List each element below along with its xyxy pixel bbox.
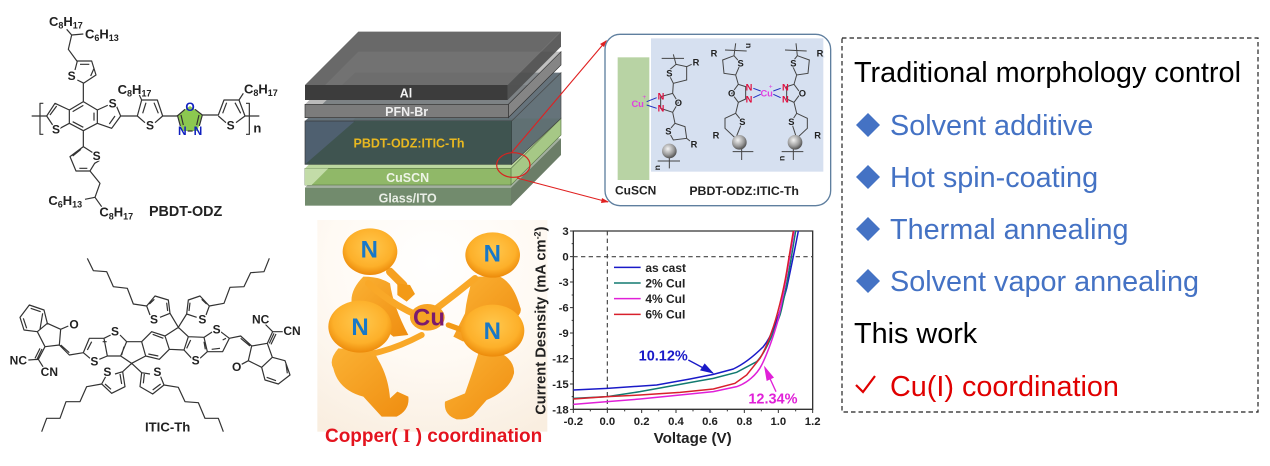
centre polymer unit: R	[713, 130, 720, 140]
heading: Traditional morphology control: Traditional morphology control	[854, 57, 1241, 89]
molecule: PBDT-ODZ polymer structure: C	[48, 193, 58, 208]
figure: front right	[445, 305, 524, 419]
figure: front left: N	[351, 314, 369, 341]
molecule: ITIC-Th acceptor structure: S	[213, 322, 221, 336]
molecule: ITIC-Th acceptor structure: O	[69, 317, 79, 331]
y tick labels: -12	[552, 354, 569, 366]
copper ion centre	[753, 83, 781, 98]
molecule: ITIC-Th acceptor structure: S	[198, 312, 206, 326]
molecule: PBDT-ODZ polymer structure: C	[49, 14, 58, 29]
molecule: ITIC-Th acceptor structure: CN	[283, 324, 301, 338]
x tick labels: 0.6	[702, 416, 718, 428]
molecule: ITIC-Th acceptor structure	[10, 258, 301, 435]
left polymer unit	[652, 54, 700, 170]
x tick labels: 1.0	[770, 416, 786, 428]
molecule: PBDT-ODZ polymer structure: 8	[253, 88, 258, 98]
layer: PFN-Br	[305, 52, 561, 119]
curve: as cast	[573, 231, 798, 390]
layer: CuSCN	[305, 118, 561, 185]
layer: PFN-Br: PFN-Br	[385, 105, 428, 119]
list item: Cu(I) coordination: Cu(I) coordination	[890, 371, 1119, 403]
x tick labels: 0.4	[668, 416, 685, 428]
y tick labels	[552, 226, 569, 416]
figure: back right	[437, 232, 521, 342]
right polymer unit: N	[782, 82, 789, 92]
molecule: PBDT-ODZ polymer structure: N	[194, 124, 202, 138]
y tick labels: 0	[562, 252, 569, 264]
list item: Hot spin-coating: Hot spin-coating	[890, 162, 1098, 194]
heading: This work: This work	[854, 318, 978, 350]
left polymer unit: n	[652, 165, 662, 170]
y tick labels: -6	[559, 303, 569, 315]
annotation: 12.34%	[748, 366, 798, 407]
y tick labels: -15	[552, 379, 569, 391]
molecule: PBDT-ODZ polymer structure: 8	[109, 211, 114, 221]
x tick labels	[564, 416, 821, 428]
illustration: four N figures holding Cu	[317, 220, 547, 447]
left polymer unit: O	[675, 98, 682, 108]
caption: Copper(I) coordination: Copper( I ) coordination	[325, 426, 542, 447]
molecule: PBDT-ODZ polymer structure: 6	[94, 33, 99, 43]
right polymer unit: n	[776, 156, 786, 161]
panel: CuSCN / PBDT-ODZ:ITIC-Th interface	[605, 34, 831, 206]
molecule: PBDT-ODZ polymer structure: 17	[123, 211, 133, 221]
right polymer unit: S	[788, 117, 794, 127]
figure: front right: N	[484, 318, 501, 345]
copper ion left	[631, 94, 657, 109]
right polymer unit: N	[782, 94, 789, 104]
molecule: ITIC-Th acceptor structure: O	[232, 360, 241, 374]
molecule: PBDT-ODZ polymer structure: C	[85, 26, 94, 41]
molecule: PBDT-ODZ polymer structure: S	[146, 118, 154, 132]
legend: 4% CuI	[645, 292, 685, 306]
molecule: PBDT-ODZ polymer structure: C	[99, 205, 109, 220]
x tick labels: 0.8	[736, 416, 752, 428]
left polymer unit: R	[691, 139, 698, 149]
left polymer unit: S	[665, 126, 671, 136]
panel: morphology control list	[842, 38, 1258, 412]
copper ion centre: Cu	[760, 88, 773, 98]
molecule: PBDT-ODZ polymer structure: O	[185, 100, 195, 114]
molecule: ITIC-Th acceptor structure: S	[192, 354, 200, 368]
figure: back left: N	[361, 236, 378, 263]
right polymer unit: R	[814, 130, 821, 140]
centre polymer unit: N	[746, 94, 753, 104]
molecule: ITIC-Th acceptor structure: S	[90, 354, 98, 368]
left polymer unit: R	[693, 58, 700, 68]
x tick labels: 0.0	[599, 416, 615, 428]
curve: 6% CuI	[573, 231, 793, 399]
molecule: PBDT-ODZ polymer structure: 8	[58, 21, 63, 31]
left polymer unit: S	[666, 69, 672, 79]
molecule: PBDT-ODZ polymer structure: C	[118, 82, 127, 97]
molecule: PBDT-ODZ polymer structure: S	[109, 96, 117, 110]
molecule: PBDT-ODZ polymer structure: 17	[73, 21, 83, 31]
molecule: PBDT-ODZ polymer structure: H	[132, 82, 141, 97]
annotation: 10.12%	[639, 348, 714, 374]
centre polymer unit: S	[738, 59, 744, 69]
copper ion centre: +	[769, 83, 773, 90]
molecule: ITIC-Th acceptor structure: ITIC-Th	[145, 420, 190, 435]
molecule: PBDT-ODZ polymer structure: 13	[109, 33, 119, 43]
molecule: ITIC-Th acceptor structure: S	[111, 324, 119, 338]
right polymer unit: S	[790, 59, 796, 69]
annotation: 12.34%: 12.34%	[748, 391, 798, 407]
molecule: ITIC-Th acceptor structure: NC	[10, 354, 27, 368]
list item: Thermal annealing: Thermal annealing	[890, 214, 1129, 246]
molecule: ITIC-Th acceptor structure: NC	[252, 312, 270, 326]
molecule: PBDT-ODZ polymer structure: 6	[58, 200, 63, 210]
molecule: PBDT-ODZ polymer structure: S	[68, 69, 76, 83]
molecule: PBDT-ODZ polymer structure: 17	[268, 88, 278, 98]
centre polymer unit	[711, 43, 754, 160]
molecule: PBDT-ODZ polymer structure: H	[63, 193, 72, 208]
molecule: PBDT-ODZ polymer structure: S	[52, 122, 60, 136]
right polymer unit	[776, 43, 824, 161]
figure: back right: N	[484, 241, 501, 268]
layer: Al: Al	[400, 86, 412, 100]
molecule: PBDT-ODZ polymer structure: S	[227, 118, 235, 132]
legend: as cast	[645, 261, 686, 275]
y tick labels: -18	[552, 404, 569, 416]
centre polymer unit: N	[746, 82, 753, 92]
callout circle	[497, 153, 530, 177]
axis title: Current density: Current Desnsity (mA cm	[534, 239, 550, 415]
chart: J-V curves	[533, 226, 821, 447]
list item: Solvent additive: Solvent additive	[890, 110, 1093, 142]
legend	[614, 261, 686, 322]
legend: 2% CuI	[645, 276, 685, 290]
molecule: PBDT-ODZ polymer structure: C	[244, 81, 253, 96]
figure: back left	[343, 228, 417, 337]
curve: 4% CuI	[573, 231, 794, 404]
copper ion left: +	[642, 94, 646, 101]
layer: Glass/ITO: Glass/ITO	[379, 191, 437, 205]
right polymer unit: R	[817, 48, 824, 58]
x tick labels: -0.2	[564, 416, 583, 428]
centre polymer unit: O	[728, 89, 735, 99]
molecule: PBDT-ODZ polymer structure: H	[258, 81, 268, 96]
left polymer unit: N	[658, 92, 665, 102]
x tick labels: 0.2	[634, 416, 650, 428]
Cu centre with hands: Cu	[413, 304, 445, 331]
axis title: Current density: )	[534, 226, 550, 231]
y tick labels: -3	[559, 277, 569, 289]
molecule: ITIC-Th acceptor structure: CN	[41, 365, 58, 379]
arrows: zoom from device to interface panel	[512, 40, 609, 203]
molecule: PBDT-ODZ polymer structure: H	[63, 14, 73, 29]
curve: 2% CuI	[573, 231, 796, 398]
molecule: PBDT-ODZ polymer structure: 8	[127, 89, 132, 99]
centre polymer unit: S	[739, 117, 745, 127]
plot frame and ticks	[570, 231, 813, 413]
left polymer unit: N	[658, 104, 665, 114]
y tick labels: 3	[562, 226, 569, 238]
axis title: Voltage: Voltage (V)	[654, 430, 732, 447]
device stack: layered solar cell diagram	[305, 32, 561, 206]
molecule: PBDT-ODZ polymer structure: N	[178, 124, 187, 138]
molecule: PBDT-ODZ polymer structure	[32, 14, 278, 221]
annotation: 10.12%: 10.12%	[639, 348, 688, 364]
layer: CuSCN: CuSCN	[386, 171, 429, 185]
axis title: Current density: -2	[533, 231, 543, 239]
layer: Glass/ITO	[305, 138, 561, 206]
label: CuSCN: CuSCN	[615, 183, 656, 197]
molecule: PBDT-ODZ polymer structure: S	[93, 149, 101, 163]
CuSCN layer block	[618, 57, 649, 180]
molecule: PBDT-ODZ polymer structure: H	[99, 26, 109, 41]
right polymer unit: O	[799, 89, 806, 99]
molecule: PBDT-ODZ polymer structure: 13	[72, 200, 82, 210]
layer: Al	[305, 32, 561, 100]
molecule: PBDT-ODZ polymer structure: H	[114, 205, 123, 220]
figure: front left	[328, 301, 422, 417]
molecule: ITIC-Th acceptor structure: S	[153, 365, 161, 379]
centre polymer unit: R	[711, 48, 718, 58]
molecule: PBDT-ODZ polymer structure: PBDT-ODZ	[149, 204, 222, 220]
copper ion left: Cu	[631, 99, 644, 109]
molecule: PBDT-ODZ polymer structure: 17	[141, 89, 151, 99]
legend: 6% CuI	[645, 308, 685, 322]
molecule: PBDT-ODZ polymer structure: n	[253, 120, 261, 135]
layer: PBDT-ODZ:ITIC-Th: PBDT-ODZ:ITIC-Th	[354, 137, 464, 151]
y tick labels: -9	[559, 328, 569, 340]
label: PBDT-ODZ:ITIC-Th: PBDT-ODZ:ITIC-Th	[689, 184, 799, 198]
layer: PBDT-ODZ:ITIC-Th	[305, 73, 561, 164]
centre polymer unit: n	[744, 43, 754, 48]
molecule: ITIC-Th acceptor structure: S	[150, 312, 158, 326]
list item: Solvent vapor annealing: Solvent vapor annealing	[890, 266, 1199, 298]
molecule: ITIC-Th acceptor structure: S	[103, 365, 111, 379]
x tick labels: 1.2	[805, 416, 821, 428]
